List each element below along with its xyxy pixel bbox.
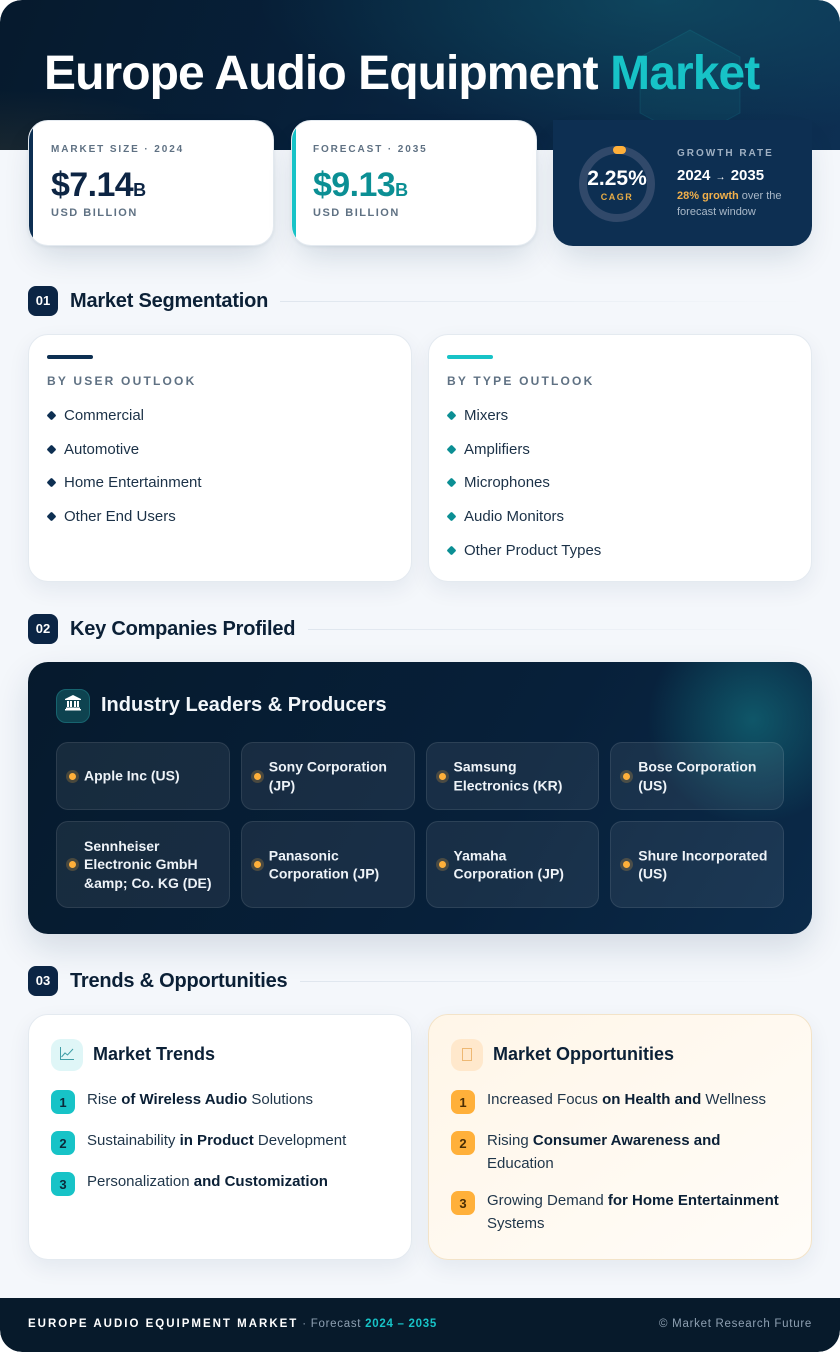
section number 02 [28,614,58,644]
CAGR ring: CAGR [601,192,633,202]
footer credit: © Market Research Future [659,1318,812,1330]
decorative hexagon [640,30,740,120]
company: Sennheiser: Electronic GmbH [84,856,198,872]
panel: market opportunities: Education [487,1154,554,1172]
section number 02: 02 [36,621,50,636]
panel: by type outlook: BY TYPE OUTLOOK [447,374,594,388]
opportunity 1 [451,1090,475,1114]
panel: market trends [28,1014,412,1260]
company: Samsung: Electronics (KR) [454,777,562,793]
company: Bose: Bose Corporation [638,758,756,774]
panel: by type outlook: Microphones [464,474,550,491]
trend 2: 2 [59,1136,67,1151]
panel: market opportunities: Growing Demand for Home Entertainment [487,1192,779,1209]
trend 3 [51,1172,75,1196]
stat card: market size: MARKET SIZE · 2024 [51,144,184,155]
footer title: EUROPE AUDIO EQUIPMENT MARKET · Forecast 2024 – 2035 [28,1318,437,1330]
panel: market trends: Personalization and Customization [87,1173,328,1190]
panel: market opportunities: Systems [487,1214,545,1232]
company: Panasonic: Panasonic [269,847,339,863]
stat card: market size: $7.14B [51,166,146,204]
stat card: forecast: FORECAST · 2035 [313,144,428,155]
company: Sennheiser: &amp; Co. KG (DE) [84,875,212,891]
stat card: growth rate [553,120,812,246]
footer [0,1298,840,1352]
trend 2 [51,1131,75,1155]
panel: by user outlook: Other End Users [64,508,176,525]
stat card: forecast: $9.13B [313,166,408,204]
panel: market opportunities: Increased Focus on Health and Wellness [487,1091,766,1108]
panel: by user outlook: Home Entertainment [64,474,202,491]
stat card: forecast: USD BILLION [313,207,400,219]
panel: by user outlook: Commercial [64,407,144,424]
company: Sony: Sony Corporation [269,758,387,774]
panel: by type outlook: Mixers [464,407,508,424]
company: Apple [56,742,230,810]
company: Shure: (US) [638,866,667,882]
company: Samsung: Samsung [454,758,517,774]
company: Yamaha: Yamaha [454,847,506,863]
heading: key companies: Key Companies Profiled [70,618,295,640]
growth text: GROWTH RATE [677,148,774,159]
panel: by type outlook: Audio Monitors [464,508,564,525]
heading: trends and opportunities: Trends & Opportunities [70,970,287,992]
icon: bank [56,689,90,723]
company: Panasonic [241,821,414,908]
icon: chart [51,1039,83,1071]
panel: market trends: Rise of Wireless Audio Solutions [87,1091,313,1108]
company: Bose: (US) [638,777,667,793]
growth text: 2024 → 2035 [677,167,764,184]
stat card: market size [28,120,274,246]
panel: by type outlook [428,334,812,582]
company: Bose [610,742,784,810]
trend 3: 3 [59,1177,67,1192]
company: Panasonic: Corporation (JP) [269,866,379,882]
growth text: 28% growth over the [677,190,782,202]
title: Europe Audio Equipment Market [44,47,759,100]
CAGR ring: 2.25% [587,167,647,190]
section number 01 [28,286,58,316]
opportunity 2: 2 [459,1136,467,1151]
company: Sennheiser [56,821,230,908]
trends heading: Market Trends [93,1044,215,1064]
opportunity 1: 1 [459,1095,467,1110]
growth text: forecast window [677,206,756,218]
section number 01: 01 [36,293,50,308]
stat card: forecast [291,120,537,246]
opportunity 2 [451,1131,475,1155]
panel: industry leaders [28,662,812,934]
heading: market segmentation: Market Segmentation [70,290,268,312]
stat card: market size: USD BILLION [51,207,138,219]
panel: by user outlook: Automotive [64,441,139,458]
company: Sony [241,742,414,810]
panel: by user outlook: BY USER OUTLOOK [47,374,196,388]
panel: by type outlook: Other Product Types [464,542,601,559]
panel: market opportunities [428,1014,812,1260]
company: Samsung [426,742,599,810]
growth text [677,148,782,218]
CAGR ring [579,146,655,222]
panel heading: Industry Leaders & Producers [101,694,387,716]
panel: market trends: Sustainability in Product Development [87,1132,346,1149]
company: Shure [610,821,784,908]
opportunity 3 [451,1191,475,1215]
icon: missing glyph box [451,1039,483,1071]
company: Yamaha [426,821,599,908]
panel: by type outlook: Amplifiers [464,441,530,458]
panel: by user outlook [28,334,412,582]
company: Sony: (JP) [269,777,295,793]
company: Apple: Apple Inc (US) [84,768,180,784]
section number 03 [28,966,58,996]
company: Sennheiser: Sennheiser [84,838,159,854]
panel: market opportunities: Rising Consumer Awareness and [487,1132,720,1149]
trend 1 [51,1090,75,1114]
hero banner [0,0,840,150]
opportunity 3: 3 [459,1196,467,1211]
trend 1: 1 [59,1095,67,1110]
company: Yamaha: Corporation (JP) [454,866,564,882]
opportunities heading: Market Opportunities [493,1044,674,1064]
section number 03: 03 [36,973,50,988]
company: Shure: Shure Incorporated [638,847,767,863]
